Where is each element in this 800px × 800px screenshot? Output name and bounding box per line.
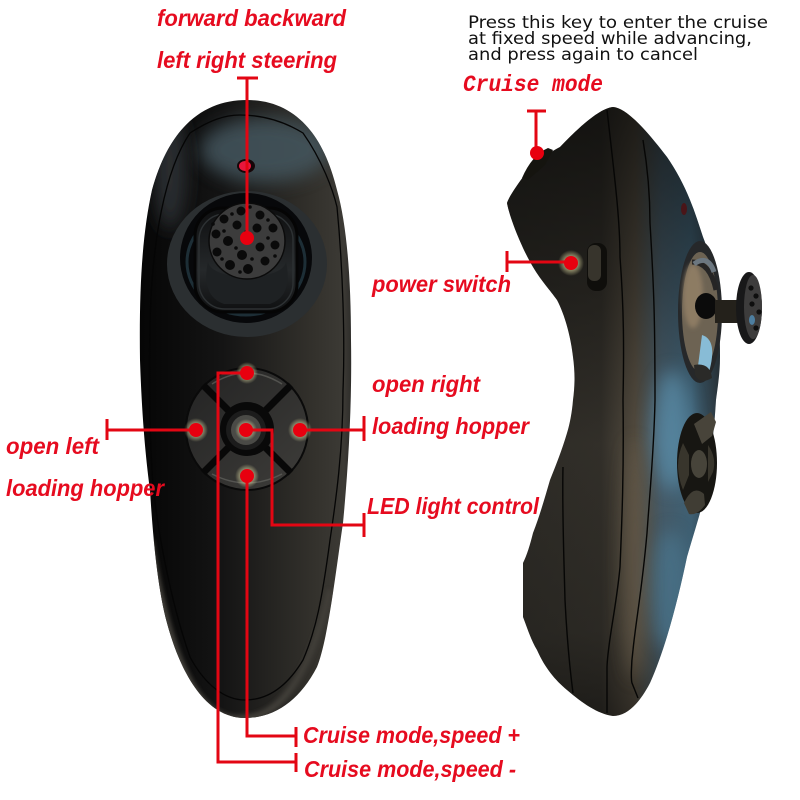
side indicator light bbox=[681, 203, 687, 215]
joystick socket, side bbox=[678, 241, 722, 383]
label: power switch: power switch bbox=[371, 271, 511, 297]
leader: speed plus bbox=[247, 476, 296, 747]
joystick well bbox=[167, 191, 327, 337]
callout dots bbox=[189, 146, 578, 483]
remote body, front bbox=[130, 95, 360, 725]
joystick, side bbox=[715, 272, 762, 344]
label: open left: open left bbox=[6, 433, 100, 459]
label: Cruise mode, speed minus: Cruise mode,speed - bbox=[304, 756, 516, 782]
body seam line bbox=[149, 115, 344, 700]
label: loading hopper, left: loading hopper bbox=[6, 475, 165, 501]
side view of remote control bbox=[500, 100, 762, 725]
side seam lines bbox=[563, 110, 655, 713]
label: loading hopper, right: loading hopper bbox=[372, 413, 530, 439]
leader lines bbox=[107, 78, 571, 772]
label: Cruise mode, speed plus: Cruise mode,speed + bbox=[303, 722, 520, 748]
leader: power switch bbox=[507, 251, 571, 272]
description text: and press again to cancel bbox=[468, 45, 698, 65]
leader: speed minus bbox=[218, 373, 296, 772]
leader: open right hopper bbox=[300, 416, 364, 441]
label: LED light control: LED light control bbox=[367, 493, 540, 519]
label: Cruise mode: Cruise mode bbox=[463, 72, 603, 98]
direction pad bbox=[186, 368, 308, 490]
remote body, side bbox=[500, 100, 725, 725]
leader: cruise mode button bbox=[527, 111, 546, 153]
direction pad, side bbox=[677, 412, 717, 514]
leader: LED light control bbox=[246, 430, 364, 537]
cruise button bbox=[522, 148, 553, 180]
front view of remote control bbox=[130, 95, 360, 725]
description text: at fixed speed while advancing, bbox=[468, 29, 752, 49]
control glows bbox=[184, 250, 584, 488]
joystick perforated head bbox=[209, 203, 285, 279]
label: open right: open right bbox=[372, 371, 481, 397]
leader: open left hopper bbox=[107, 419, 196, 440]
label: forward backward: forward backward bbox=[157, 5, 347, 31]
power switch bbox=[587, 243, 607, 291]
description text bbox=[468, 13, 768, 65]
indicator light bbox=[237, 159, 255, 173]
label: left right steering: left right steering bbox=[157, 47, 337, 73]
description text: Press this key to enter the cruise bbox=[468, 13, 768, 33]
leader: joystick bbox=[237, 78, 258, 238]
